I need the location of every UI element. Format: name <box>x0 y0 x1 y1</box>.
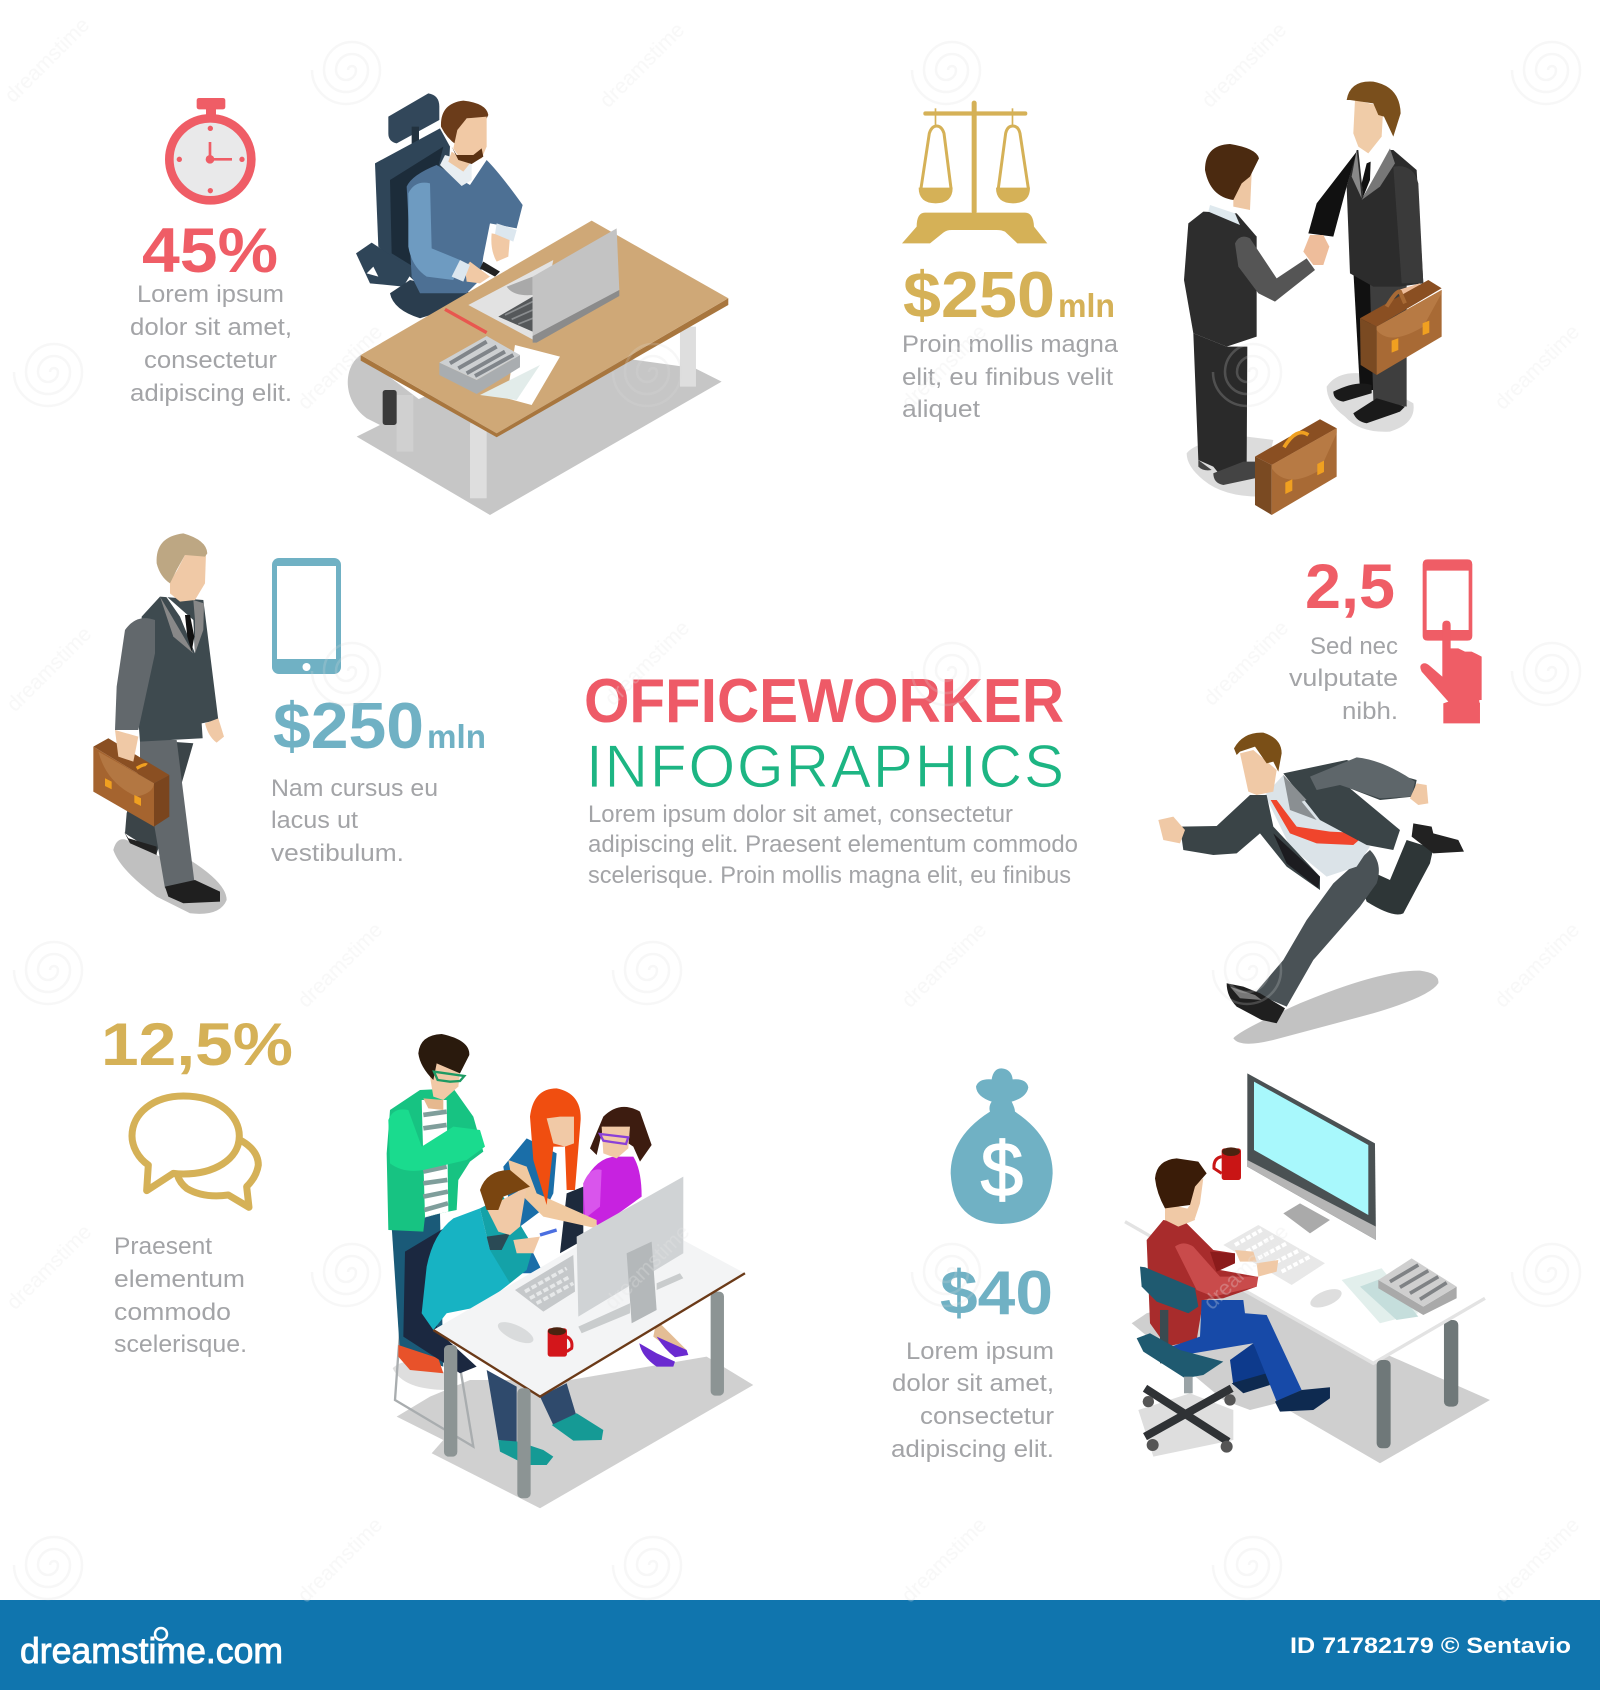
text: dreamstime <box>897 320 991 414</box>
text block: consectetur <box>920 1403 1054 1430</box>
illustration: team around a computer <box>387 1034 753 1508</box>
text block <box>891 1338 1054 1463</box>
illustration: man typing at desktop computer <box>1125 1073 1490 1463</box>
text block: aliquet <box>902 396 980 423</box>
panel: scales stat <box>902 101 1119 423</box>
text: dreamstime <box>1197 18 1291 112</box>
panel: money stat <box>891 1068 1054 1463</box>
text block: elit, eu finibus velit <box>902 364 1113 391</box>
panel: touch stat <box>1289 552 1482 725</box>
text block: dolor sit amet, <box>892 1370 1054 1397</box>
text block: Lorem ipsum <box>906 1338 1054 1365</box>
text: dreamstime <box>897 1513 991 1607</box>
text block: commodo <box>114 1299 231 1326</box>
text block: vulputate <box>1289 665 1398 692</box>
text block: dolor sit amet, <box>130 314 292 341</box>
stat value: mln <box>427 718 486 755</box>
icon: speech bubbles <box>132 1096 258 1207</box>
text: dreamstime <box>1490 918 1584 1012</box>
icon: money bag: $ <box>981 1128 1023 1213</box>
text: dreamstime <box>293 1513 387 1607</box>
text: dreamstime <box>1490 320 1584 414</box>
stat value <box>903 258 1115 331</box>
text block: adipiscing elit. <box>891 1436 1054 1463</box>
title: INFOGRAPHICS <box>586 733 1064 800</box>
footer wordmark: dreamstime.com <box>20 1630 283 1671</box>
text block <box>271 775 438 867</box>
icon: stopwatch <box>169 98 251 200</box>
illustration: running businessman <box>1158 733 1464 1044</box>
illustration: handshake of two businessmen <box>1184 82 1442 515</box>
text: dreamstime <box>293 918 387 1012</box>
text: dreamstime <box>1490 1513 1584 1607</box>
stat value <box>273 689 486 762</box>
text block: Praesent <box>114 1233 212 1260</box>
text: dreamstime <box>600 616 694 710</box>
stat value: 45% <box>142 216 278 286</box>
stat value: 12,5% <box>101 1011 293 1078</box>
text: dreamstime <box>600 1220 694 1314</box>
intro text block: Lorem ipsum dolor sit amet, consectetur <box>588 801 1013 828</box>
title <box>584 667 1064 800</box>
icon: money bag <box>951 1068 1053 1224</box>
stat value: $250 <box>273 689 424 762</box>
panel: stopwatch stat <box>130 98 292 407</box>
stat value: $250 <box>903 258 1055 331</box>
icon: smartphone <box>272 558 341 674</box>
footer bar <box>0 1600 1600 1690</box>
illustration: man at laptop desk <box>348 93 728 515</box>
text block: consectetur <box>144 347 277 374</box>
icon: balance scales <box>902 101 1047 243</box>
text block: scelerisque. <box>114 1331 247 1358</box>
text: dreamstime <box>595 18 689 112</box>
icon: finger tapping phone <box>1420 559 1482 723</box>
stat value: $40 <box>940 1259 1053 1328</box>
text block <box>114 1233 247 1358</box>
text block: Nam cursus eu <box>271 775 438 802</box>
text block: adipiscing elit. <box>130 380 292 407</box>
text: dreamstime <box>897 918 991 1012</box>
intro text block <box>588 801 1078 889</box>
text block: Proin mollis magna <box>902 331 1119 358</box>
text block: Lorem ipsum <box>137 281 284 308</box>
illustration: walking businessman with briefcase <box>93 533 227 914</box>
stat value: mln <box>1058 287 1115 324</box>
panel: phone stat <box>271 558 486 867</box>
text block: lacus ut <box>271 807 358 834</box>
text block <box>902 331 1119 423</box>
intro text block: scelerisque. Proin mollis magna elit, eu finibus <box>588 862 1071 889</box>
text block: Sed nec <box>1310 633 1398 660</box>
text: dreamstime <box>293 320 387 414</box>
text: dreamstime <box>2 622 96 716</box>
title: OFFICEWORKER <box>584 667 1064 736</box>
text block <box>1289 633 1398 725</box>
panel: chat stat <box>101 1011 293 1358</box>
intro text block: adipiscing elit. Praesent elementum commodo <box>588 831 1078 858</box>
text block: nibh. <box>1342 698 1398 725</box>
text: dreamstime <box>1199 1220 1293 1314</box>
text block: vestibulum. <box>271 840 404 867</box>
text block: elementum <box>114 1266 245 1293</box>
text: dreamstime <box>1199 616 1293 710</box>
text: dreamstime <box>2 1220 96 1314</box>
text: dreamstime <box>0 13 94 107</box>
footer credit: ID 71782179 © Sentavio <box>1290 1633 1571 1658</box>
text block <box>130 281 292 407</box>
stat value: 2,5 <box>1305 552 1395 622</box>
